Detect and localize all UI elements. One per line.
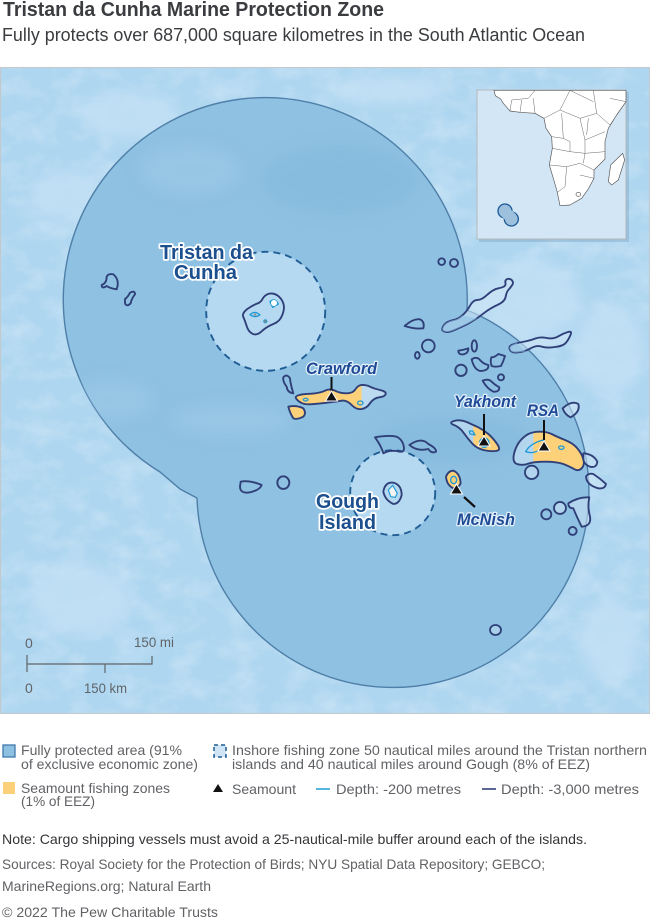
- legend: fully protected area: Fully protected area (91%: [21, 742, 182, 758]
- depth contours around Tristan and Crawford: [102, 274, 386, 419]
- scale bar: [25, 634, 174, 696]
- seamount zone: Yakhont: [451, 420, 499, 451]
- fully protected area: [63, 98, 589, 687]
- Africa landmass: [494, 90, 626, 206]
- sources: [2, 856, 545, 894]
- note: Note: Cargo shipping vessels must avoid a 25-nautical-mile buffer around each of the islands.: [2, 831, 587, 847]
- subtitle: Fully protects over 687,000 square kilometres in the South Atlantic Ocean: [2, 25, 585, 45]
- inset map: Africa locator: [477, 90, 629, 242]
- scale bar: 150 km: [84, 680, 127, 696]
- legend: seamount fishing zones: [3, 780, 170, 809]
- Madagascar: [608, 153, 625, 185]
- seamount zone: McNish: [446, 471, 461, 488]
- seamount: McNish: [450, 484, 515, 529]
- seamount: McNish: McNish: [457, 510, 515, 529]
- seamount zone: RSA: [513, 432, 584, 470]
- map panel: [0, 67, 650, 714]
- inshore zone: Tristan: [206, 252, 325, 371]
- scale bar: 0: [25, 635, 33, 651]
- legend: seamount fishing zones: Seamount fishing zones: [21, 780, 170, 796]
- seamount: Yakhont: Yakhont: [454, 392, 517, 411]
- label: Gough Island: Island: [319, 512, 376, 534]
- depth contours south-east: [375, 403, 606, 535]
- seamount: Crawford: [306, 359, 378, 401]
- legend: [3, 742, 647, 809]
- label: Tristan da Cunha: Tristan da: [160, 242, 254, 264]
- legend: inshore fishing zone: islands and 40 nautical miles around Gough (8% of EEZ): [232, 756, 590, 772]
- legend: depth 3000: Depth: -3,000 metres: [501, 781, 639, 797]
- legend: fully protected area: of exclusive economic zone): [21, 756, 198, 772]
- inshore zone: Gough: [350, 450, 435, 535]
- seamount: Crawford: Crawford: [306, 359, 378, 378]
- legend: seamount: Seamount: [232, 781, 296, 797]
- seamount: Yakhont: [454, 392, 517, 446]
- scale bar: 150 mi: [134, 634, 174, 650]
- legend: inshore fishing zone: Inshore fishing zone 50 nautical miles around the Tristan northern: [232, 742, 647, 758]
- legend: depth 200: Depth: -200 metres: [336, 781, 461, 797]
- label: Tristan da Cunha: [160, 242, 254, 284]
- seamount: RSA: RSA: [527, 401, 559, 420]
- legend: inshore fishing zone: [214, 742, 647, 772]
- depth contours north-east: [405, 258, 571, 392]
- Tristan da Cunha zone marker: [498, 204, 518, 226]
- seamount: RSA: [527, 401, 559, 451]
- sources: MarineRegions.org; Natural Earth: [2, 878, 211, 894]
- depth contours west of Gough: [240, 476, 289, 493]
- label: Tristan da Cunha: Cunha: [174, 262, 238, 284]
- label: Gough Island: [316, 491, 379, 534]
- seamount zone: Crawford: [283, 376, 386, 419]
- label: Gough Island: Gough: [316, 491, 379, 513]
- legend: seamount fishing zones: (1% of EEZ): [21, 793, 95, 809]
- sources: Sources: Royal Society for the Protection of Birds; NYU Spatial Data Repository; GEBCO;: [2, 856, 545, 872]
- scale bar: 0: [25, 680, 33, 696]
- legend: fully protected area: [3, 742, 198, 772]
- isolated contour south: [490, 625, 501, 635]
